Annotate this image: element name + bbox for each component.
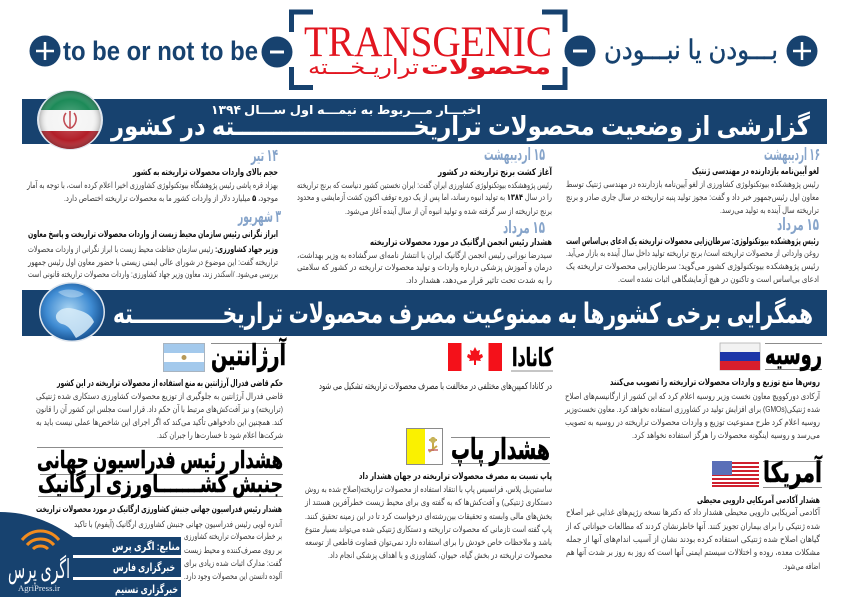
icon: argentina flag bbox=[164, 344, 204, 372]
country title bbox=[511, 344, 553, 372]
country title bbox=[763, 455, 823, 489]
banner: countries bbox=[22, 282, 827, 342]
body text bbox=[304, 484, 552, 560]
english slogan: to be or not to be bbox=[63, 36, 258, 66]
country title: هشدار پاپ bbox=[451, 434, 550, 467]
headline: هشدار رئیس انجمن ارگانیک در مورد محصولات تراریخته bbox=[370, 236, 552, 248]
country title: آمریکا bbox=[763, 455, 823, 489]
title english: TRANSGENIC bbox=[304, 19, 552, 66]
body text: بهزاد قره پاشی رئیس پژوهشگاه بیوتکنولوژی کشاورزی اخیرا اعلام کرده است، با توجه به آمار bbox=[26, 179, 278, 190]
warning title: جنبش کشـــــــاورزی ارگانیک bbox=[38, 470, 283, 498]
icon: plus left bbox=[30, 36, 60, 66]
body text bbox=[297, 180, 552, 216]
body text: بررسی می‌شود. /اسکندر زند، معاون وزیر جهاد کشاورزی: واردات محصولات تراریخته قانونی است bbox=[28, 269, 278, 279]
icon: plus right bbox=[786, 36, 818, 66]
body text: قاضی فدرال آرژانتین به جلوگیری از توزیع محصولات کشاورزی دستکاری شده ژنتیکی bbox=[36, 390, 283, 401]
icon: minus left bbox=[262, 36, 292, 68]
body text: درمان و آموزش پزشکی درباره واردات و تولید محصولات تراریخته در کشور که سلامتی bbox=[297, 261, 552, 272]
sources list bbox=[73, 537, 181, 597]
news column: left bbox=[26, 146, 281, 279]
logo url: AgriPress.ir bbox=[18, 583, 60, 593]
body text: اضافه می‌شود. bbox=[783, 561, 820, 571]
body text: محصولات تراریخته در بخش گیاه، حیوان، کشاورزی و یا اهداف پزشکی انجام داد. bbox=[328, 550, 552, 560]
body text: (تراریخته) و نیز آفت‌کش‌های مرتبط با آن حکم داد. قرار است مجلس این کشور آن را قانون bbox=[36, 403, 283, 415]
icon: canada flag bbox=[448, 343, 502, 371]
persian slogan: بـــودن یا نبـــودن bbox=[604, 35, 778, 66]
body text bbox=[564, 390, 820, 440]
date: 15 mordad: ۱۵ مرداد bbox=[503, 218, 545, 238]
header: to be or not to be bbox=[30, 36, 292, 68]
icon: vatican flag bbox=[406, 428, 442, 464]
country title bbox=[211, 337, 287, 372]
source bar 1: منابع: اگری پرس bbox=[112, 540, 180, 553]
body text: را به شدت تحت تاثیر قرار می‌دهد، هشدار داد. bbox=[406, 275, 552, 285]
panel: america bbox=[565, 455, 823, 571]
body text bbox=[566, 247, 819, 284]
logo: agripress bbox=[0, 512, 73, 597]
icon: russia flag bbox=[720, 343, 760, 370]
body text: بر خطرات محصولات تراریخته کشاورزی bbox=[184, 531, 282, 541]
news column: right bbox=[566, 145, 820, 284]
country title bbox=[451, 434, 550, 467]
body text: آلوده دانستن این محصولات وجود دارد. bbox=[184, 570, 282, 581]
body text: بر روی مصرف‌کننده و محیط زیست bbox=[184, 545, 282, 555]
date: 3 shahrivar: ۳ شهریور bbox=[237, 207, 281, 227]
date: 14 tir: ۱۴ تیر bbox=[250, 146, 278, 166]
body text: پاپ گفته است تازمانی که محصولات تراریخته و دستکاری ژنتیکی شده می‌تواند بسیار متنوع bbox=[305, 524, 552, 534]
body text: شرکت‌ها اعلام شود تا خسارت‌ها را جبران کند. bbox=[157, 430, 283, 440]
headline: حکم قاضی فدرال آرژانتین به منع استفاده از محصولات تراریخته در این کشور bbox=[56, 377, 283, 389]
headline: آغاز کشت برنج تراریخته در کشور bbox=[437, 166, 553, 178]
body text: رئیس پژوهشکده بیوتکنولوژی کشاورزی ایران گفت: ایران نخستین کشور دنیاست که برنج تراریخته bbox=[297, 180, 552, 190]
body text: تراریخته سال آینده به تولید می‌رسد. bbox=[720, 204, 819, 215]
title: transgenic with brackets bbox=[292, 12, 565, 88]
body text: برنج تراریخته از سر گرفته شده و تولید انبوه آن از سال آینده آغاز می‌شود. bbox=[345, 205, 552, 216]
subtitle: ۱۳۹۴ bbox=[211, 103, 241, 117]
body text bbox=[566, 178, 819, 215]
panel: argentina bbox=[36, 337, 287, 440]
date: 15 ordibehesht: ۱۵ اردیبهشت bbox=[484, 145, 545, 165]
body text: گفت: مدارک اثبات شده زیادی برای bbox=[184, 558, 283, 568]
banner: iran report bbox=[22, 90, 827, 151]
source bar 3: خبرگزاری تسنیم bbox=[115, 583, 178, 596]
body text bbox=[27, 244, 278, 279]
subtitle: اخبـــار مـــربوط به نیمـــه اول ســـال bbox=[244, 103, 481, 118]
body text: آندره لویی رئیس فدراسیون جهانی جنبش کشاورزی ارگانیک (آیفوم) با تاکید bbox=[74, 518, 282, 529]
body text: وزیر جهاد کشاورزی: رئیس سازمان حفاظت محیط زیست با ابراز نگرانی از واردات محصولات bbox=[28, 244, 278, 255]
icon: wifi arcs bbox=[22, 531, 59, 549]
body text bbox=[297, 250, 552, 285]
icon: usa flag bbox=[712, 461, 759, 487]
warning title bbox=[37, 447, 283, 498]
header: persian slogan bbox=[564, 35, 818, 66]
title persian thin: تراریـخـــته bbox=[308, 56, 419, 79]
body text: تراریخته گفت: این موضوع در شورای عالی ایمنی زیستی با حضور معاون اول رئیس جمهور bbox=[27, 257, 278, 267]
body text bbox=[36, 390, 284, 440]
body text: کند. همچنین این دادخواهی تأکید می‌کند که اگر اجرای این شاخص‌ها عملی نیست باید به bbox=[36, 416, 284, 427]
headline: ابراز نگرانی رئیس سازمان محیط زیست از واردات محصولات تراریخت و پاسخ معاون bbox=[28, 228, 278, 240]
title persian bold: محصولات bbox=[421, 56, 551, 79]
body text: ساستین‌بل پلاس، فرانسیس پاپ با انتقاد استفاده از محصولات تراریخته(اصلاح شده به روش bbox=[305, 484, 552, 494]
logo wordmark: اگری پرس bbox=[8, 554, 70, 585]
body text: موجود، ۵ میلیارد دلار از واردات کشور ما به محصولات تراریخته اختصاص دارد. bbox=[64, 193, 278, 203]
news column: middle bbox=[297, 145, 553, 285]
country title: کانادا bbox=[512, 344, 553, 372]
body text: را در سال ۱۳۸۴ به تولید انبوه رساند، اما پس از یک دوره توقف اکنون کشت آزمایشی و محدود bbox=[297, 191, 552, 202]
body text bbox=[26, 179, 278, 203]
headline: در کانادا کمپین‌های مختلفی در مخالفت با مصرف محصولات تراریخته تشکیل می شود bbox=[319, 381, 552, 391]
panel: pope bbox=[304, 428, 552, 560]
date: 15 mordad: ۱۵ مرداد bbox=[777, 215, 819, 235]
body text: سیدرضا نورانی رئیس انجمن ارگانیک ایران با انتشار نامه‌ای سرگشاده به وزیر بهداشت، bbox=[297, 250, 552, 260]
body text: بخش‌های مالی وابسته و تحقیقات بین‌رشته‌ای درخواست کرد تا در این زمینه تحقیق کنند. bbox=[305, 511, 552, 521]
icon: minus right bbox=[564, 36, 596, 66]
country title: آرژانتین bbox=[211, 337, 287, 372]
source bar 2: خبرگزاری فارس bbox=[113, 561, 175, 574]
panel: russia bbox=[564, 339, 822, 440]
body text: باشد و ملاحظات خاص خودش را برای استفاده دارد نمی‌توان قضاوت قاطعی از توسعه bbox=[305, 537, 552, 547]
headline: پاپ نسبت به مصرف محصولات تراریخته در جهان هشدار داد bbox=[359, 471, 552, 482]
panel: canada bbox=[319, 343, 553, 391]
headline: هشدار رئیس فدراسیون جهانی جنبش کشاورزی ارگانیک در مورد محصولات تراریخت bbox=[36, 503, 282, 515]
warning title: هشدار رئیس فدراسیون جهانی bbox=[37, 447, 283, 474]
panel: organic federation warning bbox=[36, 447, 283, 581]
brackets bbox=[292, 12, 565, 88]
body text bbox=[74, 518, 283, 581]
icon: iran flag egg bbox=[37, 90, 103, 151]
body text: دستکاری ژنتیکی) و آفت‌کش‌ها که به گفته وی برای محیط زیست خطرآفرین هستند از bbox=[304, 496, 552, 507]
icon: globe bbox=[39, 282, 105, 342]
headline: حجم بالای واردات محصولات تراریخته به کشور bbox=[132, 167, 278, 178]
body text bbox=[565, 506, 821, 571]
body text: شده ژنتیکی(GMOs) برای افزایش تولید در کشاورزی استفاده نخواهد کرد. معاون نخست‌وزیر bbox=[564, 404, 820, 414]
